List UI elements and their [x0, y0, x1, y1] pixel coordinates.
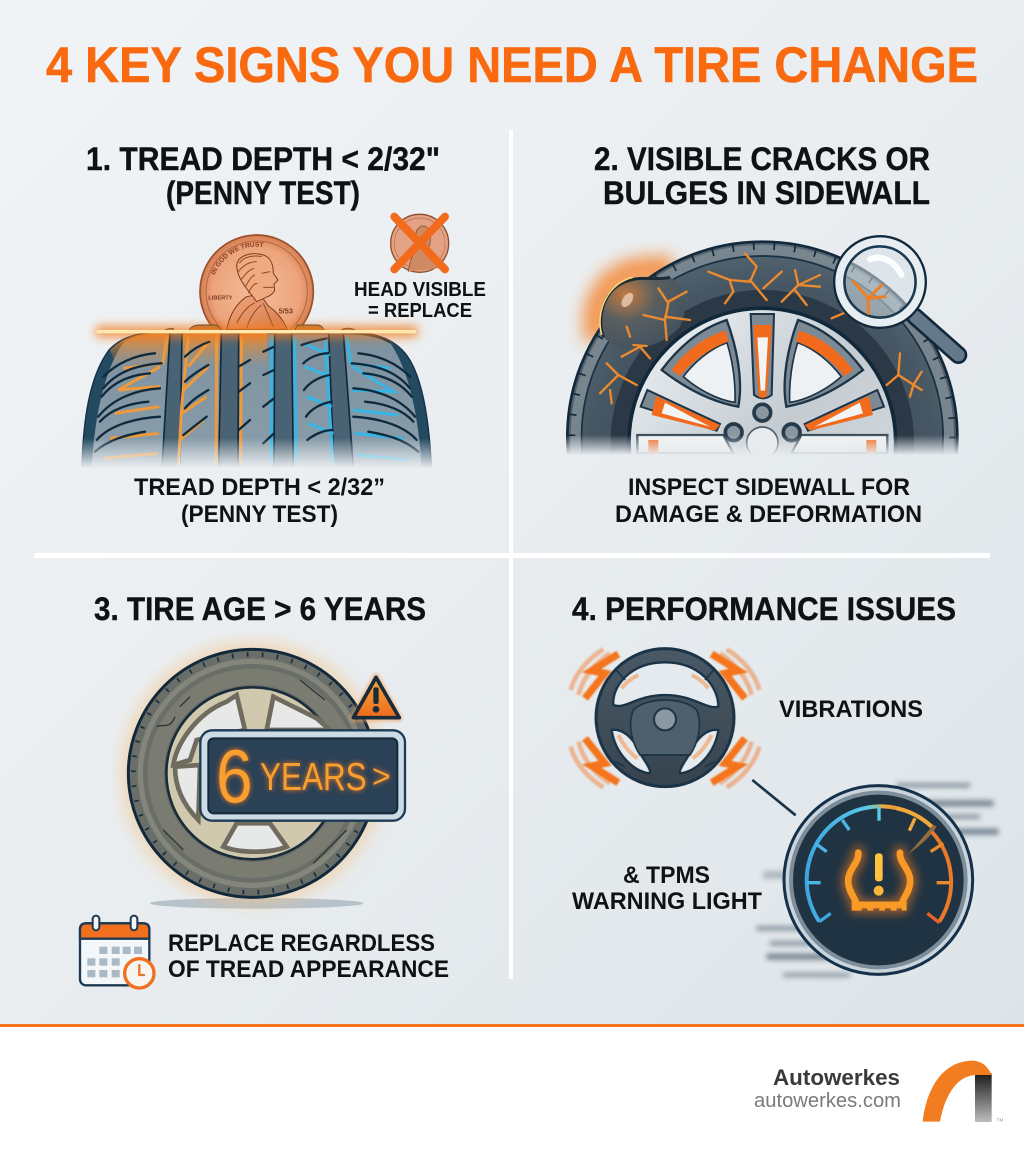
caption: replace regardless: REPLACE REGARDLESS — [168, 930, 435, 957]
tpms warning light — [848, 853, 910, 911]
caption: tread depth — [134, 474, 385, 528]
tread depth line — [95, 326, 418, 337]
panel: tire age — [80, 591, 449, 988]
illustration: aged tire — [121, 642, 405, 909]
tread block — [83, 333, 431, 468]
tire body — [566, 240, 959, 454]
alloy rim — [627, 306, 898, 454]
digital display: 6 years — [200, 730, 405, 821]
heading: sign 1: 1. TREAD DEPTH < 2/32" — [86, 141, 440, 177]
footer band — [0, 1027, 1024, 1154]
illustration: wheel and gauge — [571, 649, 998, 975]
caption: replace regardless: OF TREAD APPEARANCE — [168, 956, 449, 983]
connector line — [752, 780, 796, 815]
icon: penny: 5/53 — [279, 306, 293, 315]
footer orange rule — [0, 1024, 1024, 1027]
heading: sign 2: BULGES IN SIDEWALL — [603, 175, 930, 211]
icon: magnifying glass — [839, 241, 958, 355]
icon: penny: LIBERTY — [208, 296, 233, 302]
label: vibrations: VIBRATIONS — [779, 696, 923, 723]
tread sipes — [95, 338, 418, 452]
title: 4 KEY SIGNS YOU NEED A TIRE CHANGE — [46, 37, 978, 93]
illustration: penny on tread — [81, 234, 432, 468]
ground shadow — [150, 898, 363, 909]
label: head visible = replace: HEAD VISIBLE — [354, 279, 486, 301]
blue tread channels — [271, 337, 410, 468]
sidewall bulge — [601, 277, 685, 349]
worn tire — [128, 649, 376, 897]
panel: performance issues — [571, 591, 998, 975]
vibration marks — [571, 649, 759, 787]
heading: sign 1 — [86, 141, 440, 211]
footer brand text: Autowerkes — [773, 1065, 900, 1090]
label: head visible = replace: = REPLACE — [368, 300, 472, 322]
illustration: damaged tire — [566, 235, 968, 454]
caption: tread depth: (PENNY TEST) — [181, 501, 338, 528]
motion streaks — [757, 785, 998, 975]
label: head visible = replace — [354, 279, 486, 322]
digital display: 6 years: 6 — [216, 735, 253, 819]
label: tpms warning light: WARNING LIGHT — [572, 888, 762, 915]
digital display: 6 years: YEARS — [260, 755, 367, 799]
label: tpms warning light: & TPMS — [623, 862, 710, 889]
orange tread channels — [103, 333, 241, 468]
panel: tread depth — [81, 141, 486, 528]
heading: sign 3: 3. TIRE AGE > 6 YEARS — [94, 591, 426, 627]
heading: sign 2 — [594, 141, 930, 211]
icon: warning triangle — [353, 677, 399, 718]
sidewall cracks — [600, 253, 922, 403]
caption: tread depth: TREAD DEPTH < 2/32” — [134, 474, 385, 501]
caption: inspect sidewall — [615, 474, 922, 528]
caption: inspect sidewall: INSPECT SIDEWALL FOR — [628, 474, 910, 501]
icon: penny: IN GOD WE TRUST — [210, 242, 264, 275]
brand logo — [923, 1061, 1004, 1122]
panel: cracks and bulges — [566, 147, 968, 522]
label: tpms warning light — [572, 862, 762, 915]
brand logo: TM — [997, 1117, 1004, 1122]
tread top blocks — [163, 325, 358, 333]
heading: sign 2: 2. VISIBLE CRACKS OR — [594, 141, 930, 177]
heading: sign 4: 4. PERFORMANCE ISSUES — [572, 591, 956, 627]
icon: dashboard gauge — [784, 786, 973, 974]
icon: penny — [199, 234, 314, 330]
footer brand text — [754, 1065, 901, 1112]
caption: inspect sidewall: DAMAGE & DEFORMATION — [615, 501, 922, 528]
footer brand text: autowerkes.com — [754, 1090, 901, 1112]
heading: sign 1: (PENNY TEST) — [166, 175, 360, 211]
caption: replace regardless — [168, 930, 449, 983]
icon: steering wheel — [596, 649, 734, 787]
icon: crossed-out penny — [391, 214, 449, 272]
digital display: 6 years: > — [372, 758, 391, 795]
icon: calendar with clock — [80, 916, 154, 988]
